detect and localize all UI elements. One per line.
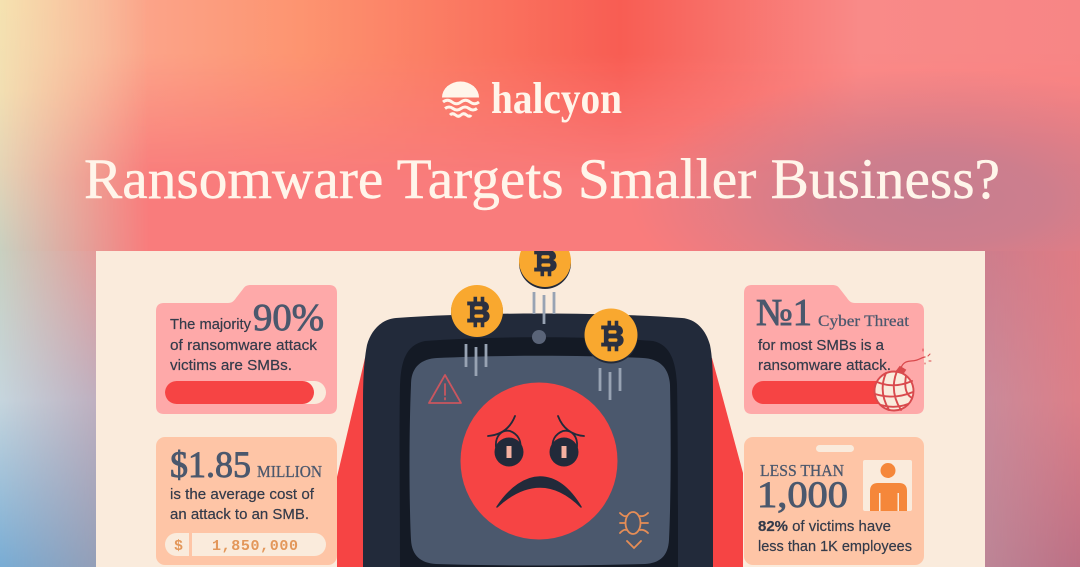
- panel: 90% of victims: victims are SMBs.: [170, 357, 292, 374]
- panel: less than 1,000: [744, 437, 924, 565]
- folder card: [156, 285, 337, 414]
- monitor bezel: [400, 337, 678, 567]
- panel: $1.85 million: [156, 437, 337, 565]
- panel: No1 cyber threat: [744, 285, 931, 414]
- progress bar: [165, 381, 326, 404]
- falling bitcoin: left: [451, 285, 503, 376]
- icon: warning triangle: [429, 375, 461, 403]
- card: [744, 437, 924, 565]
- folder card: [744, 285, 924, 414]
- description: of ransomware attack: [170, 337, 317, 354]
- amount field: [165, 533, 326, 556]
- monitor: [363, 314, 713, 567]
- face circle: [460, 382, 618, 540]
- description: 82% of victims have: [758, 518, 891, 535]
- panel: less than 1,000: less than 1K employees: [758, 538, 912, 555]
- falling bitcoin: top: [519, 251, 571, 324]
- logo wordmark: halcyon: [491, 74, 622, 123]
- tag slot: [816, 445, 854, 452]
- panel: $1.85 million: an attack to an SMB.: [170, 506, 309, 523]
- monitor stand: red sides: [337, 358, 743, 567]
- frown mouth: [497, 477, 581, 507]
- logo icon: sun over waves: [442, 82, 479, 116]
- title: Ransomware Targets Smaller Business?: [84, 148, 1000, 211]
- right eye: [550, 416, 584, 466]
- monitor screen: [410, 356, 671, 566]
- stat heading: LESS THAN: [760, 461, 844, 480]
- stat heading: $1.85: [170, 445, 251, 486]
- left eye: [488, 416, 524, 466]
- infographic panel: [96, 235, 985, 567]
- icon: bomb globe: [874, 349, 931, 410]
- progress bar: [752, 381, 878, 404]
- stat heading: The majority: [170, 316, 251, 333]
- panel: less than 1,000: 1,000: [757, 475, 848, 516]
- sad face: [460, 382, 618, 540]
- panel: 90% of victims: 90%: [253, 297, 324, 339]
- amount field: $: [174, 538, 183, 555]
- amount field: 1,850,000: [212, 538, 298, 555]
- stat heading: №1: [756, 292, 812, 334]
- logo: [442, 74, 622, 123]
- panel: 90% of victims: [156, 285, 337, 414]
- icon: bug with chevron: [620, 512, 648, 548]
- falling bitcoin: right: [584, 308, 638, 400]
- monitor outer casing: [363, 314, 713, 567]
- card: [156, 437, 337, 565]
- panel: No1 cyber threat: Cyber Threat: [818, 313, 910, 330]
- panel: No1 cyber threat: ransomware attack.: [758, 357, 891, 374]
- icon: person: [863, 460, 912, 511]
- description: is the average cost of: [170, 486, 315, 503]
- panel: $1.85 million: MILLION: [257, 462, 322, 481]
- webcam dot: [532, 330, 546, 344]
- description: for most SMBs is a: [758, 337, 885, 354]
